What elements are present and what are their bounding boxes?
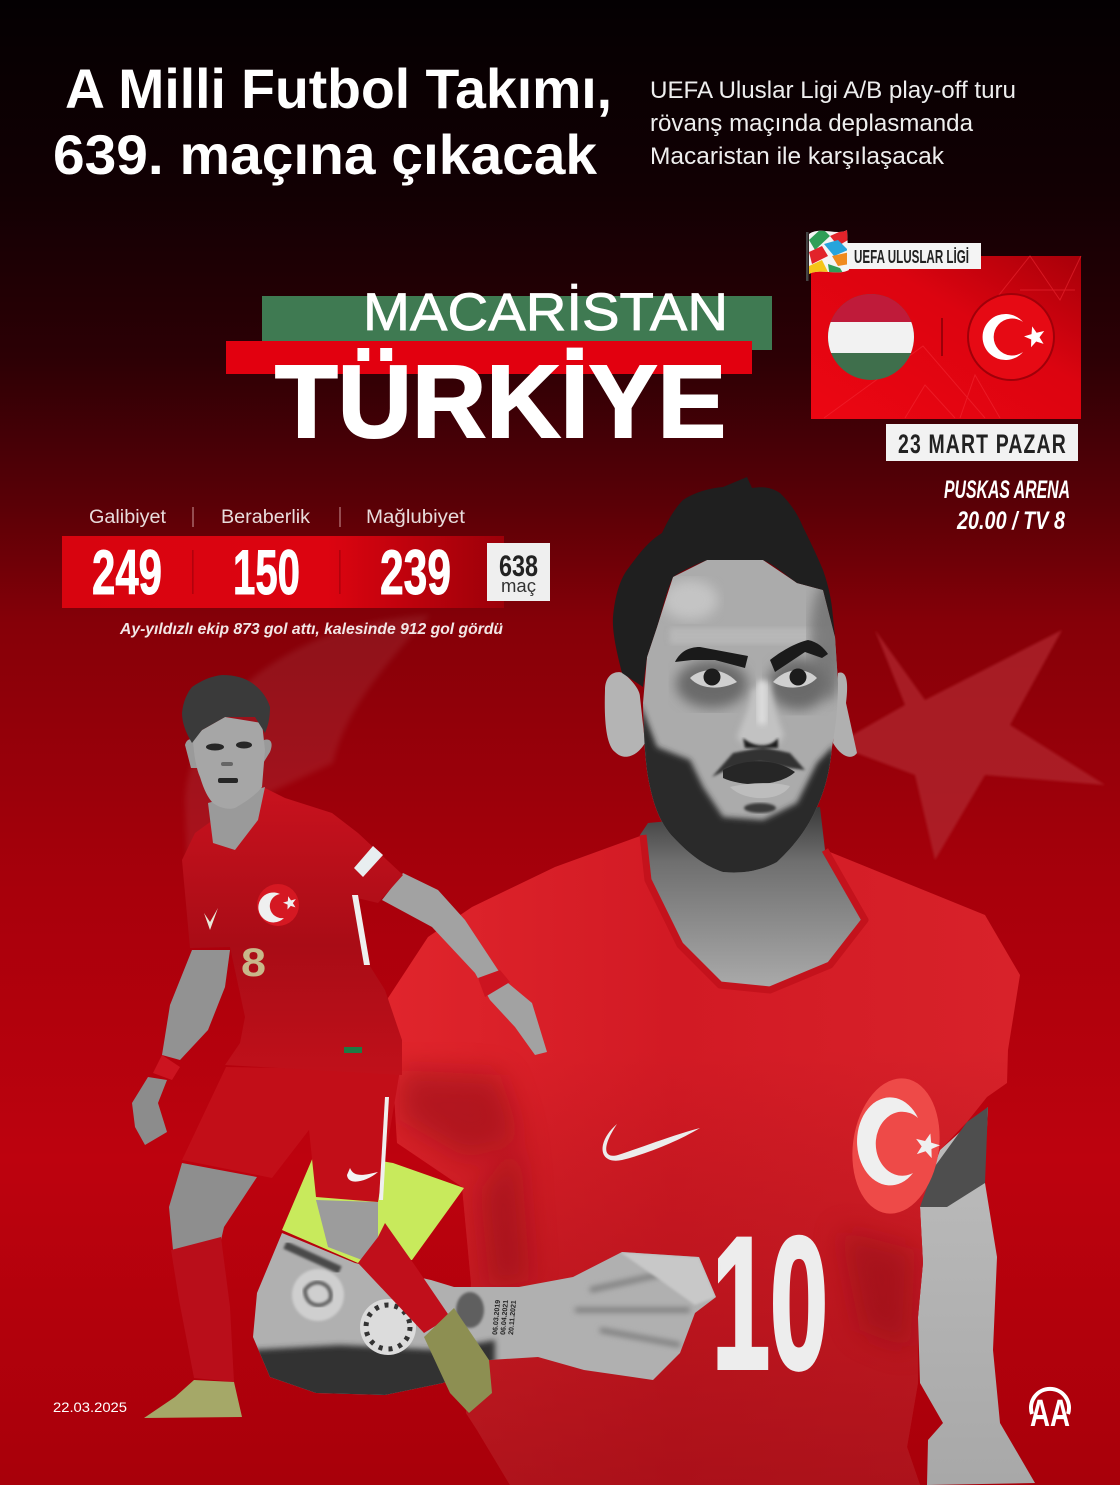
- jersey: [388, 835, 1020, 1485]
- raised sock: [358, 1223, 450, 1333]
- shorts stripe: [379, 1097, 389, 1200]
- hem label: [344, 1047, 362, 1053]
- UEFA tag: UEFA ULUSLAR LİGİ: [854, 247, 969, 267]
- venue and time: 20.00 / TV 8: [956, 507, 1065, 535]
- arda ears: [185, 739, 272, 768]
- moustache: [712, 747, 805, 777]
- raised boot: [424, 1308, 492, 1413]
- stat numbers: [92, 538, 451, 608]
- wrist tattoo dates: 06.03.2019: [492, 1300, 502, 1335]
- arda number: 8: [241, 941, 266, 985]
- arda jersey: [182, 788, 403, 1075]
- hair: [613, 477, 837, 687]
- right ear: [833, 672, 857, 757]
- shorts: [182, 1067, 400, 1202]
- left hand: [132, 1077, 167, 1145]
- arda face: [193, 717, 265, 809]
- soul patch: [744, 803, 776, 813]
- wrist tattoo dates: 06.04.2021: [500, 1300, 510, 1335]
- mouth: [723, 761, 795, 798]
- wrist band left: [153, 1055, 180, 1080]
- subtitle text block: [650, 77, 1016, 170]
- stat numbers: 150: [233, 538, 300, 608]
- stat labels: Beraberlik: [221, 507, 311, 528]
- AA logo: [1030, 1389, 1070, 1435]
- arda shorts logo: [347, 1168, 378, 1182]
- wrist band right: [478, 970, 510, 997]
- stat labels: Mağlubiyet: [366, 507, 466, 528]
- arda crest: [257, 884, 299, 926]
- face: [643, 560, 838, 872]
- team names banner: [226, 283, 772, 459]
- standing leg: [169, 1163, 257, 1250]
- shirt side stripe: [352, 895, 370, 965]
- jersey folds and shade: [394, 1058, 954, 1485]
- total matches box: maç: [501, 576, 536, 596]
- match divider: [941, 318, 943, 356]
- venue and time: [944, 476, 1070, 535]
- Turkey flag: [967, 293, 1055, 381]
- goals note: Ay-yıldızlı ekip 873 gol attı, kalesinde 912 gol gördü: [119, 621, 503, 638]
- background flag: crescent and star: [185, 615, 1105, 890]
- shirt number: 10: [712, 1198, 828, 1408]
- UEFA tag: [847, 243, 981, 269]
- crest: [844, 1073, 948, 1219]
- shirt tick: [204, 908, 218, 930]
- total matches box: [487, 543, 550, 601]
- raised thigh: [316, 1200, 378, 1260]
- date box: 23 MART PAZAR: [898, 429, 1066, 459]
- nose: [737, 680, 784, 748]
- stats panel: [62, 507, 550, 638]
- standing sock: [171, 1237, 234, 1382]
- sleeve badge: [354, 846, 383, 877]
- title: [53, 57, 612, 186]
- stat labels: [89, 507, 466, 528]
- collar: [643, 835, 865, 990]
- standing boot: [144, 1380, 242, 1418]
- raised arm: [382, 873, 547, 1055]
- left forearm with tattoos: [250, 1233, 716, 1400]
- subtitle text block: UEFA Uluslar Ligi A/B play-off turu: [650, 77, 1016, 104]
- date: 22.03.2025: [53, 1399, 127, 1415]
- stat numbers: 249: [92, 538, 162, 608]
- title: 639. maçına çıkacak: [53, 123, 598, 186]
- UEFA Nations League icon: [806, 230, 849, 281]
- AA logo: AA: [1030, 1393, 1070, 1435]
- beard: [640, 703, 840, 880]
- stat labels: Galibiyet: [89, 507, 167, 528]
- arda hair: [182, 675, 270, 743]
- team names banner: MACARİSTAN: [363, 283, 728, 342]
- stat numbers: 239: [380, 538, 451, 608]
- neck: [640, 807, 865, 990]
- stat bar: [62, 536, 504, 608]
- wrist tattoo dates: [492, 1300, 518, 1335]
- eyes: [690, 668, 817, 688]
- captain armband: [282, 1150, 464, 1263]
- team names banner: TÜRKİYE: [275, 344, 726, 459]
- subtitle text block: Macaristan ile karşılaşacak: [650, 143, 945, 170]
- title: A Milli Futbol Takımı,: [65, 57, 612, 120]
- arda eyes and mouth: [206, 742, 252, 783]
- total matches box: 638: [499, 550, 538, 583]
- brows: [675, 640, 828, 672]
- match panel: [805, 226, 1081, 419]
- player: large captain: [250, 477, 1035, 1485]
- swoosh: [603, 1124, 700, 1161]
- subtitle text block: rövanş maçında deplasmanda: [650, 110, 974, 137]
- left ear: [605, 672, 645, 757]
- arda neck: [208, 787, 265, 850]
- wrist tattoo dates: 20.11.2021: [508, 1300, 518, 1335]
- player: small: [132, 675, 547, 1418]
- Hungary flag: [828, 294, 914, 380]
- right arm: [918, 1107, 1035, 1485]
- far arm: [162, 950, 230, 1060]
